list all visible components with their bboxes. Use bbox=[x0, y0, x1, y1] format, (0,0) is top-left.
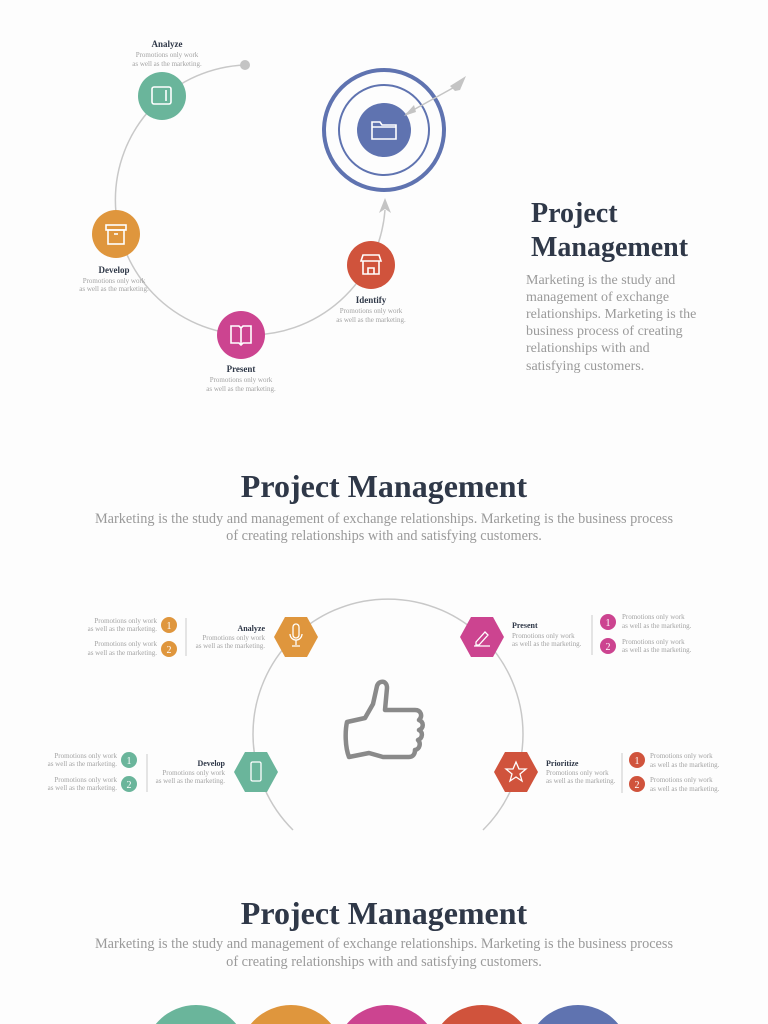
item: Present bbox=[460, 613, 692, 657]
item: Prioritize bbox=[494, 752, 720, 793]
text: side description bbox=[526, 273, 696, 374]
arc: section 2 circle bbox=[253, 599, 523, 830]
item: Prioritize: Prioritize bbox=[546, 759, 579, 768]
item: Analyze: as well as the marketing. bbox=[196, 642, 265, 650]
heading: section 2 title: Project Management bbox=[241, 468, 528, 504]
icon: thumbs up bbox=[346, 682, 423, 757]
step: Develop: Develop bbox=[98, 265, 130, 275]
item: Develop: Promotions only work bbox=[162, 769, 225, 777]
step: Develop: as well as the marketing. bbox=[79, 285, 149, 293]
item: Analyze: Promotions only work bbox=[94, 617, 157, 625]
heading: side title: Project bbox=[531, 198, 618, 229]
item: Prioritize: 2 bbox=[634, 780, 640, 791]
item: Develop: Promotions only work bbox=[54, 752, 117, 760]
item: Present: Present bbox=[512, 621, 538, 630]
step: Identify: Identify bbox=[356, 295, 387, 305]
item: Analyze: 2 bbox=[166, 645, 172, 656]
item: Prioritize: 1 bbox=[634, 756, 640, 767]
item: Develop: Develop bbox=[197, 759, 226, 768]
target: folder bbox=[324, 70, 444, 190]
step: Analyze bbox=[132, 39, 202, 120]
step: Analyze: as well as the marketing. bbox=[132, 60, 202, 68]
text: section 2 description: of creating relationships with and satisfying customers. bbox=[226, 528, 542, 544]
text: side description: satisfying customers. bbox=[526, 359, 644, 374]
item: Present: as well as the marketing. bbox=[622, 622, 692, 630]
item: Present: as well as the marketing. bbox=[512, 640, 582, 648]
text: side description: relationships with and bbox=[526, 341, 650, 356]
step: Identify: Promotions only work bbox=[340, 307, 403, 315]
text: section 3 description: of creating relationships with and satisfying customers. bbox=[226, 954, 542, 970]
item: Prioritize: Promotions only work bbox=[650, 752, 713, 760]
step: Develop bbox=[79, 210, 149, 293]
step: Identify bbox=[336, 241, 406, 324]
heading: section 3 title: Project Management bbox=[241, 895, 528, 931]
item: Present: Promotions only work bbox=[512, 632, 575, 640]
item: Analyze: Analyze bbox=[237, 624, 265, 633]
item: Prioritize: as well as the marketing. bbox=[650, 761, 720, 769]
item: Develop: Promotions only work bbox=[54, 776, 117, 784]
item: Develop bbox=[48, 752, 278, 792]
item: Develop: as well as the marketing. bbox=[48, 760, 117, 768]
item: Analyze bbox=[88, 617, 318, 657]
step: Present bbox=[206, 311, 276, 393]
item: Prioritize: Promotions only work bbox=[546, 769, 609, 777]
step: Analyze: Analyze bbox=[152, 39, 182, 49]
item: Develop: as well as the marketing. bbox=[48, 784, 117, 792]
cycle arc bbox=[115, 60, 391, 335]
text: section 2 description bbox=[95, 511, 673, 544]
text: side description: relationships. Marketing is the bbox=[526, 307, 696, 322]
text: section 3 description: Marketing is the study and management of exchange relationships. Marketing is the business process bbox=[95, 936, 673, 952]
heading: side title: Management bbox=[531, 232, 689, 263]
arrow into target bbox=[404, 76, 466, 116]
step: Develop: Promotions only work bbox=[83, 277, 146, 285]
text: section 3 description bbox=[95, 936, 673, 970]
item: Develop: as well as the marketing. bbox=[156, 777, 225, 785]
step: Present: Promotions only work bbox=[210, 376, 273, 384]
item: Analyze: Promotions only work bbox=[94, 640, 157, 648]
item: Present: 1 bbox=[606, 618, 610, 629]
item: Prioritize: Promotions only work bbox=[650, 776, 713, 784]
item: Develop: 1 bbox=[126, 756, 132, 767]
text: side description: Marketing is the study and bbox=[526, 273, 675, 288]
item: Present: as well as the marketing. bbox=[622, 646, 692, 654]
item: Analyze: as well as the marketing. bbox=[88, 625, 157, 633]
item: Analyze: as well as the marketing. bbox=[88, 649, 157, 657]
text: side description: management of exchange bbox=[526, 290, 669, 305]
step: Analyze: Promotions only work bbox=[136, 51, 199, 59]
step: Identify: as well as the marketing. bbox=[336, 316, 406, 324]
item: Analyze: Promotions only work bbox=[202, 634, 265, 642]
item: Present: Promotions only work bbox=[622, 638, 685, 646]
item: Present: Promotions only work bbox=[622, 613, 685, 621]
step: Present: as well as the marketing. bbox=[206, 385, 276, 393]
text: section 2 description: Marketing is the study and management of exchange relationships. Marketing is the business process bbox=[95, 511, 673, 527]
text: side description: business process of creating bbox=[526, 324, 683, 339]
item: Present: 2 bbox=[606, 642, 610, 653]
item: Prioritize: as well as the marketing. bbox=[650, 785, 720, 793]
step: Present: Present bbox=[227, 364, 255, 374]
heading: side title bbox=[531, 198, 689, 263]
item: Analyze: 1 bbox=[166, 621, 172, 632]
colored circles row bbox=[144, 1005, 630, 1024]
item: Develop: 2 bbox=[126, 780, 132, 791]
item: Prioritize: as well as the marketing. bbox=[546, 777, 616, 785]
